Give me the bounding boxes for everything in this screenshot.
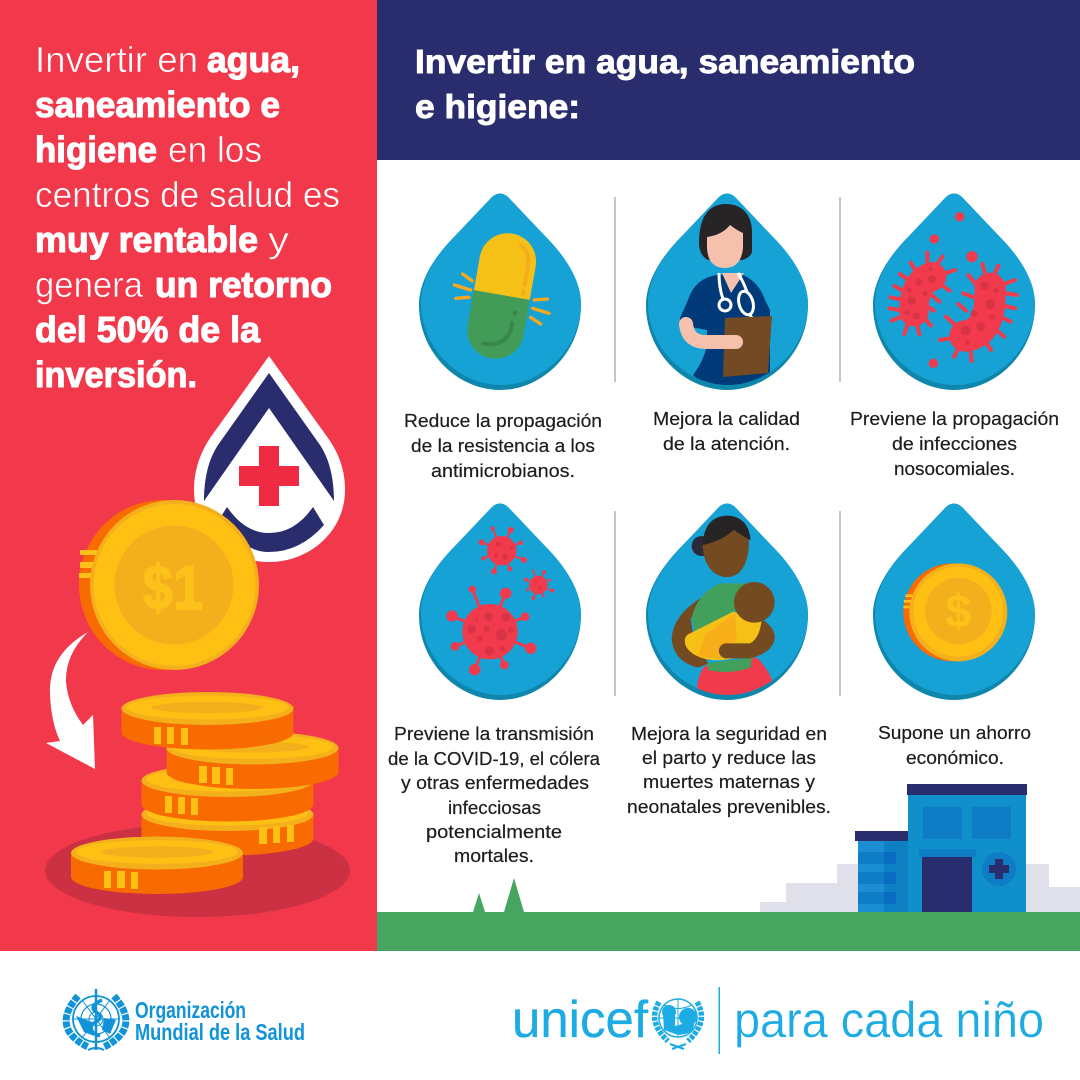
left headline text: genera — [35, 264, 144, 305]
icon: large one dollar coin — [79, 500, 259, 670]
left headline text: y — [268, 219, 289, 260]
background city steps — [760, 864, 1080, 912]
icon: health centre building — [855, 784, 1027, 912]
caption: quality of care — [653, 409, 800, 454]
caption: antimicrobial resistance: Reduce la propagación — [404, 411, 602, 431]
caption: antimicrobial resistance — [404, 411, 602, 481]
green ground with grass — [377, 878, 1080, 951]
left headline text: Invertir en — [35, 39, 198, 80]
caption: nosocomial infections: de infecciones — [892, 434, 1017, 454]
caption: economic saving: Supone un ahorro — [878, 723, 1031, 743]
caption: covid transmission: infecciosas — [448, 798, 541, 818]
icon: health water drop emblem — [194, 356, 345, 562]
panel: navy header background — [377, 0, 1080, 160]
icon: dollar coin drop — [873, 504, 1035, 700]
caption: quality of care: de la atención. — [663, 434, 790, 454]
arrow: falling coin arrow — [46, 632, 95, 769]
left headline text: del 50% de la — [35, 309, 261, 350]
icon: bacteria drop — [873, 194, 1035, 390]
left headline text — [35, 39, 340, 395]
left headline text: inversión. — [35, 354, 197, 395]
icon: mother and baby drop — [646, 504, 808, 702]
logo: UNICEF para cada niño: unicef — [512, 991, 649, 1049]
left headline text: muy rentable — [35, 219, 258, 260]
icon: capsule drop — [419, 194, 581, 390]
caption: safer childbirth: neonatales prevenibles. — [627, 797, 831, 817]
caption: covid transmission — [388, 724, 601, 866]
caption: antimicrobial resistance: antimicrobianos. — [431, 461, 575, 481]
left headline text: agua, — [207, 39, 300, 80]
icon: virus drop — [419, 504, 581, 700]
panel: left red background — [0, 0, 377, 951]
logo: UNICEF para cada niño — [512, 987, 1044, 1054]
left headline text: higiene — [35, 129, 157, 170]
logo: UNICEF para cada niño: para cada niño — [734, 992, 1044, 1048]
logo: World Health Organization: Mundial de la Salud — [135, 1019, 305, 1045]
icon: dollar coin drop: $ — [945, 585, 971, 637]
caption: covid transmission: potencialmente — [426, 822, 562, 842]
icon: large one dollar coin: $1 — [143, 554, 203, 623]
caption: quality of care: Mejora la calidad — [653, 409, 800, 429]
column dividers — [614, 197, 841, 696]
caption: covid transmission: mortales. — [454, 846, 534, 866]
left headline text: en los — [168, 129, 262, 170]
caption: safer childbirth — [627, 724, 831, 817]
left headline text: saneamiento e — [35, 84, 280, 125]
icon: coin stack with shadow — [45, 692, 350, 917]
header title: Invertir en agua, saneamiento — [415, 43, 915, 80]
caption: covid transmission: y otras enfermedades — [401, 773, 589, 793]
header title — [415, 43, 915, 125]
caption: economic saving — [878, 723, 1031, 768]
caption: safer childbirth: muertes maternas y — [643, 772, 815, 792]
caption: economic saving: económico. — [906, 748, 1004, 768]
logo: World Health Organization — [66, 989, 305, 1050]
caption: nosocomial infections: Previene la propagación — [850, 409, 1059, 429]
left headline text: un retorno — [155, 264, 332, 305]
caption: nosocomial infections: nosocomiales. — [894, 459, 1015, 479]
caption: safer childbirth: el parto y reduce las — [642, 748, 816, 768]
header title: e higiene: — [415, 88, 580, 125]
caption: covid transmission: Previene la transmisión — [394, 724, 594, 744]
left headline text: centros de salud es — [35, 174, 340, 215]
logo: World Health Organization: Organización — [135, 997, 246, 1023]
caption: antimicrobial resistance: de la resistencia a los — [411, 436, 595, 456]
caption: covid transmission: de la COVID-19, el cólera — [388, 749, 601, 769]
caption: nosocomial infections — [850, 409, 1059, 479]
icon: nurse drop — [646, 194, 808, 390]
caption: safer childbirth: Mejora la seguridad en — [631, 724, 827, 744]
